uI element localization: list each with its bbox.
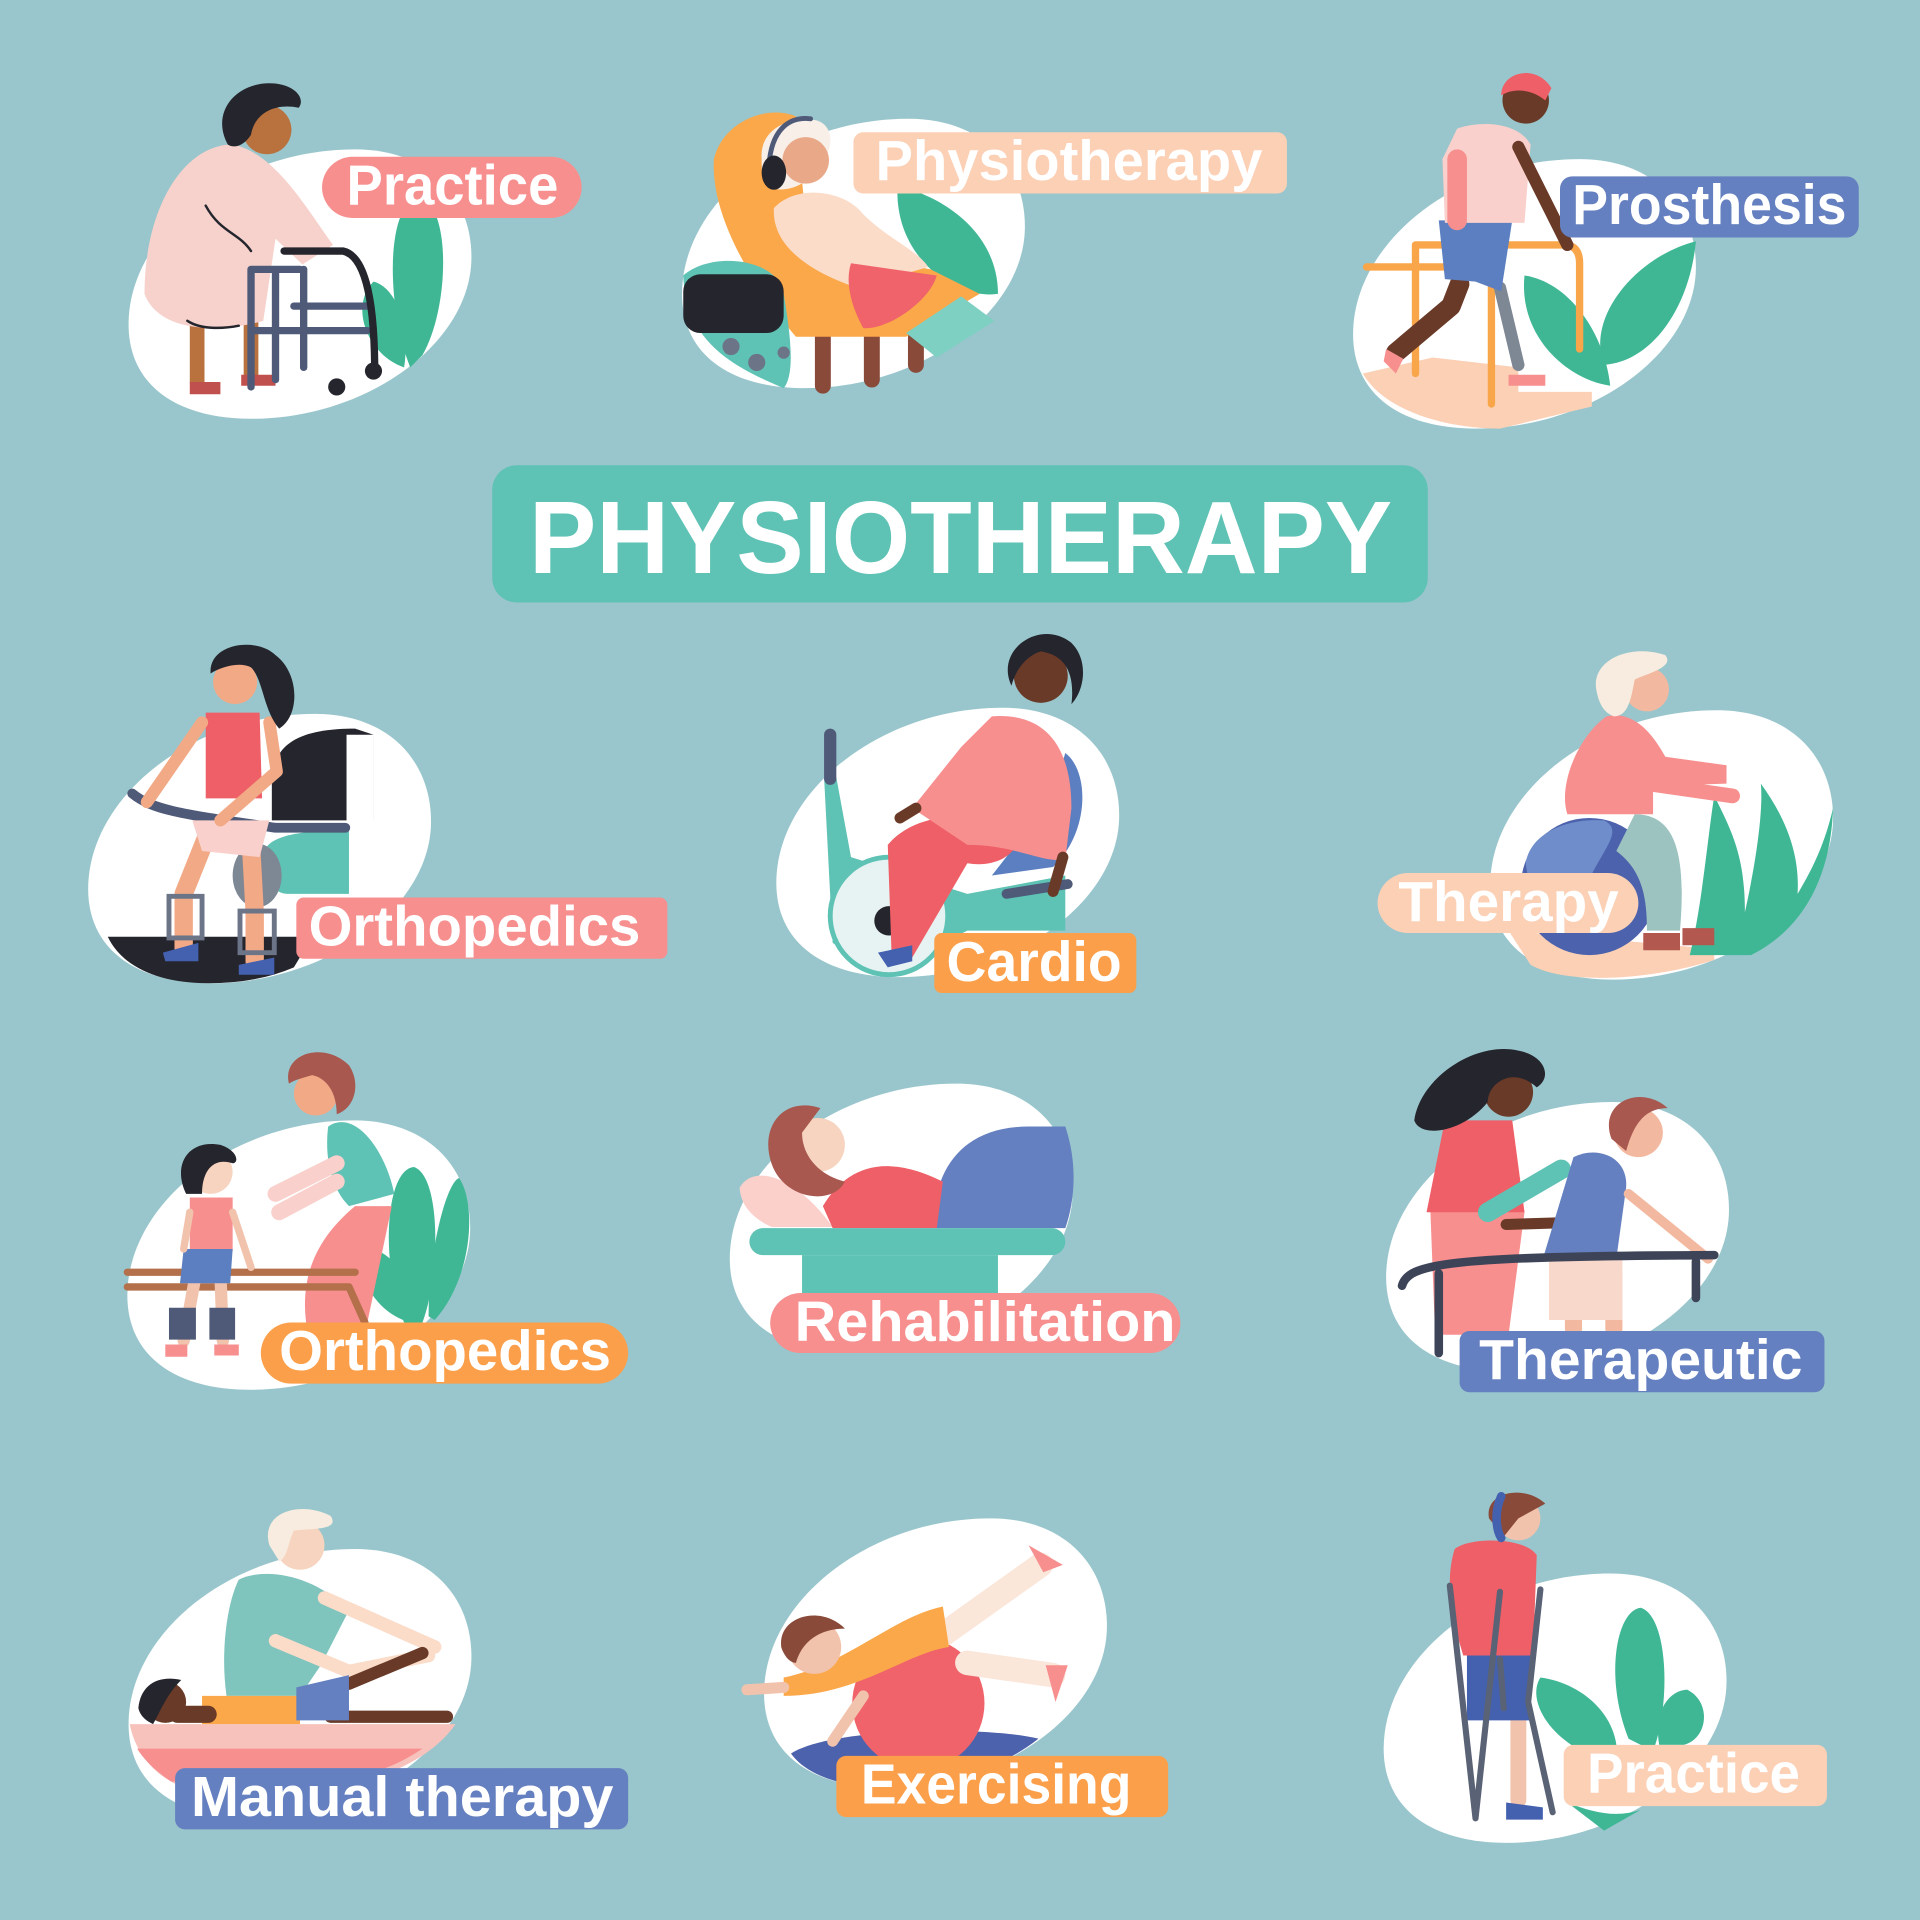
lying woman (768, 1105, 943, 1228)
parallel bar (1402, 1255, 1714, 1353)
label: Therapy (1398, 870, 1619, 933)
panel: therapy with ball (1378, 651, 1833, 980)
woman (144, 83, 333, 394)
pillow (740, 1176, 833, 1227)
white blob (1386, 1102, 1729, 1371)
steps (1363, 358, 1592, 429)
therapist (224, 1509, 435, 1696)
plant (1536, 1608, 1704, 1831)
label: Manual therapy (191, 1765, 614, 1828)
child (165, 1144, 251, 1357)
teal footrest and remote (683, 261, 791, 388)
woman (878, 634, 1083, 967)
exercise bike (824, 735, 1082, 975)
man with prosthetic leg (1384, 73, 1567, 386)
plant (362, 198, 443, 367)
white blob (682, 119, 1025, 388)
label: Cardio (947, 930, 1122, 993)
white blob (127, 1120, 470, 1390)
panel: manual therapy (129, 1509, 628, 1829)
bolster (933, 1127, 1074, 1228)
label: Practice (347, 153, 558, 216)
label: Practice (1587, 1742, 1800, 1805)
white blob (129, 1549, 471, 1818)
panel: prosthesis (1353, 73, 1859, 429)
title: PHYSIOTHERAPY (529, 480, 1392, 595)
floor (108, 937, 312, 983)
white blob (129, 149, 471, 419)
walker (251, 251, 382, 396)
white blob (88, 714, 431, 983)
parallel bars (1367, 245, 1580, 404)
person (747, 1545, 1068, 1741)
floor (1509, 931, 1714, 978)
label: Orthopedics (309, 894, 640, 957)
massage chair (714, 113, 980, 337)
floor mat (791, 1731, 1038, 1786)
panel: exercising (747, 1518, 1168, 1817)
crutches (1450, 1586, 1553, 1818)
label: Rehabilitation (795, 1290, 1176, 1353)
seaweed plant (1690, 784, 1833, 955)
label: Orthopedics (279, 1319, 611, 1382)
plant (897, 186, 998, 294)
panel: rehabilitation (730, 1084, 1180, 1353)
panel: physiotherapy massage chair (682, 113, 1287, 388)
panel: cardio (776, 634, 1136, 993)
striped cushion (906, 296, 994, 358)
young man on crutches (1439, 1493, 1545, 1820)
plants (1524, 241, 1696, 386)
seated woman (761, 118, 937, 328)
label: Prosthesis (1572, 173, 1847, 236)
white blob (1384, 1573, 1727, 1843)
white blob (1490, 710, 1833, 980)
exercise ball (1521, 818, 1658, 955)
panel: practice with crutches (1384, 1493, 1827, 1843)
chair legs (823, 324, 916, 386)
panel: child orthopedics (127, 1052, 628, 1390)
white blob (776, 708, 1119, 977)
panel: practice with walker (129, 83, 582, 419)
patient lying (138, 1653, 447, 1724)
panel: therapeutic (1386, 1049, 1824, 1392)
label: Physiotherapy (876, 129, 1263, 192)
table (749, 1228, 1065, 1293)
label: Exercising (861, 1753, 1131, 1816)
white blob (730, 1084, 1073, 1353)
exercise machine (132, 729, 373, 907)
panel: orthopedics with leg braces (88, 645, 667, 983)
label: Therapeutic (1479, 1328, 1802, 1391)
patient (1543, 1097, 1708, 1329)
therapist (276, 1052, 394, 1322)
wooden bars (127, 1272, 365, 1322)
massage table (130, 1724, 456, 1788)
elderly woman (1565, 651, 1733, 950)
white blob (1353, 159, 1696, 429)
ball (852, 1637, 984, 1769)
plant (362, 1167, 469, 1322)
therapist (1414, 1049, 1586, 1335)
woman (147, 645, 294, 975)
white blob (764, 1518, 1107, 1788)
